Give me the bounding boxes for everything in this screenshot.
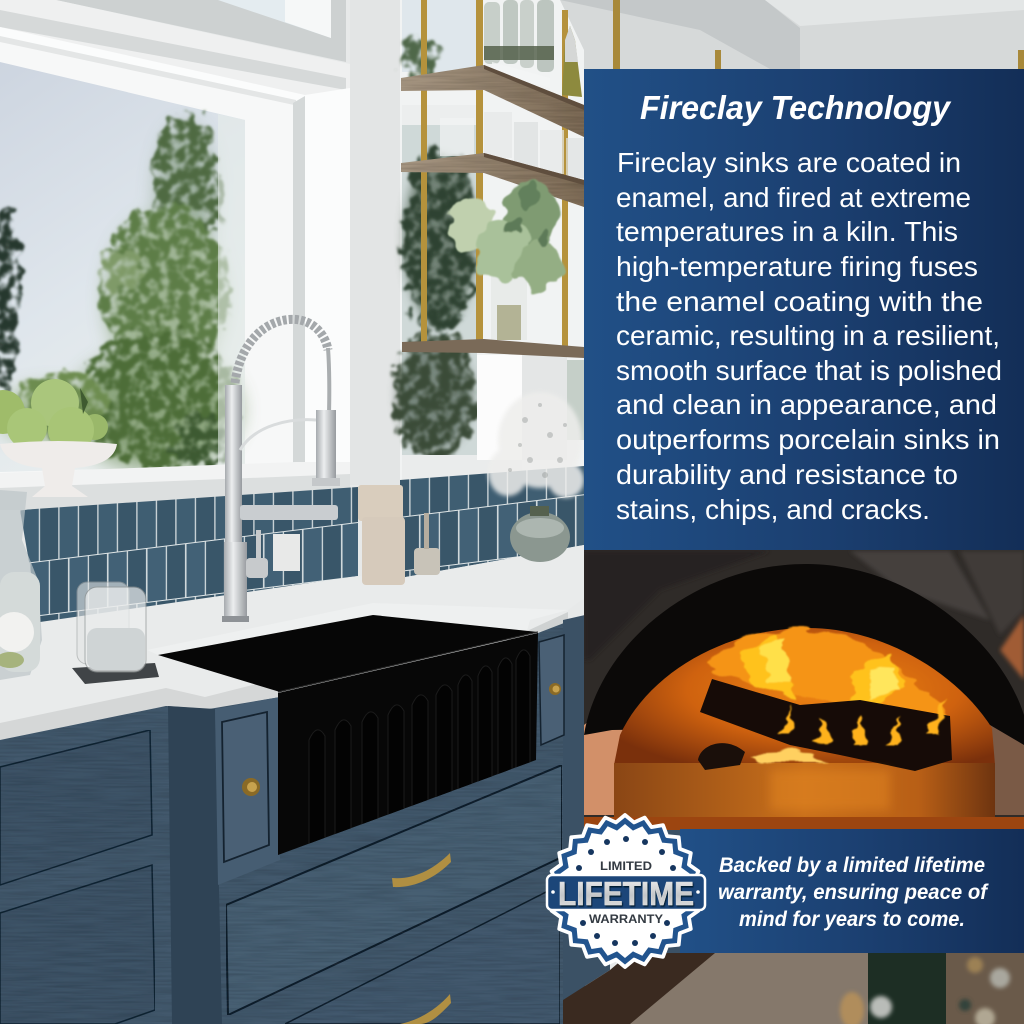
chrome faucet <box>222 319 340 622</box>
flames over log <box>750 695 945 762</box>
heading: Fireclay Technology <box>640 89 952 126</box>
floor and blurred decor <box>563 953 1024 1024</box>
flames <box>705 630 950 720</box>
ceramic mugs <box>358 485 405 585</box>
soap dispenser <box>414 513 440 575</box>
top wooden shelf <box>401 65 584 137</box>
wall pillar <box>350 0 400 485</box>
banner: warranty statement <box>680 829 1024 953</box>
backsplash tile <box>20 466 584 625</box>
soft tree mass behind foliage <box>0 125 240 470</box>
right window behind shelves <box>393 0 584 480</box>
oven floor <box>614 763 995 817</box>
fruit bowl with green apples <box>0 379 117 497</box>
label: limited: LIMITED <box>600 859 652 873</box>
ribbon <box>547 875 705 910</box>
lower drawers with brass pulls <box>226 765 562 1024</box>
label: warranty: WARRANTY <box>589 912 663 926</box>
floor brick strip <box>584 817 1024 830</box>
oven interior <box>614 628 995 765</box>
hanging plant in vase <box>450 180 562 340</box>
wall switch plate <box>273 534 300 571</box>
left cabinet doors <box>0 730 155 1024</box>
body paragraph: Fireclay sinks are coated in <box>617 147 961 178</box>
body paragraph: the enamel coating with the <box>616 286 983 317</box>
stone wall <box>584 551 1024 680</box>
body paragraph: high-temperature firing fuses <box>616 251 978 282</box>
fluted front <box>309 650 530 860</box>
body paragraph: outperforms porcelain sinks in <box>616 424 1000 455</box>
soot arch <box>584 564 1024 745</box>
label: lifetime: LIFETIME <box>558 875 694 912</box>
sink rim highlight <box>278 632 538 692</box>
middle wooden shelf <box>401 153 584 207</box>
body paragraph: enamel, and fired at extreme <box>616 182 971 213</box>
cabinet base <box>0 615 585 1024</box>
body paragraph: ceramic, resulting in a resilient, <box>616 320 1000 351</box>
brass shelf rods <box>421 0 568 348</box>
large window with trees <box>0 0 350 510</box>
ceiling <box>560 0 1024 69</box>
glass pitcher <box>0 490 42 680</box>
panel: wood fired kiln photo <box>584 550 1024 830</box>
body paragraph <box>616 147 1002 525</box>
banner: warranty statement: mind for years to come. <box>739 908 965 931</box>
upper window <box>56 0 346 62</box>
body paragraph: and clean in appearance, and <box>616 389 997 420</box>
drinking glasses on shelf <box>440 112 584 178</box>
badge: limited lifetime warranty <box>547 815 705 967</box>
glass vase with dried flowers <box>488 392 584 562</box>
logs <box>700 679 952 771</box>
small side panels and knobs <box>222 635 564 862</box>
floor reflection <box>770 770 890 810</box>
banner: warranty statement: Backed by a limited lifetime <box>719 854 985 877</box>
banner: warranty statement: warranty, ensuring peace of <box>718 881 989 904</box>
body paragraph: smooth surface that is polished <box>616 355 1002 386</box>
seal dots <box>576 836 676 946</box>
body paragraph: stains, chips, and cracks. <box>616 494 930 525</box>
panel: fireclay technology text <box>584 69 1024 551</box>
drinking glasses and coaster <box>72 582 159 684</box>
body paragraph: durability and resistance to <box>616 459 958 490</box>
pillars <box>584 723 623 815</box>
bottom wooden shelf <box>402 339 584 358</box>
ribbon dots <box>551 890 700 894</box>
marble countertop <box>0 545 584 740</box>
body paragraph: temperatures in a kiln. This <box>616 216 958 247</box>
cabinet side behind badge <box>563 829 680 1000</box>
trees outside <box>0 110 240 472</box>
scalloped seal <box>549 815 701 967</box>
black fireclay sink <box>158 615 538 860</box>
bottles on top shelf <box>484 0 582 97</box>
